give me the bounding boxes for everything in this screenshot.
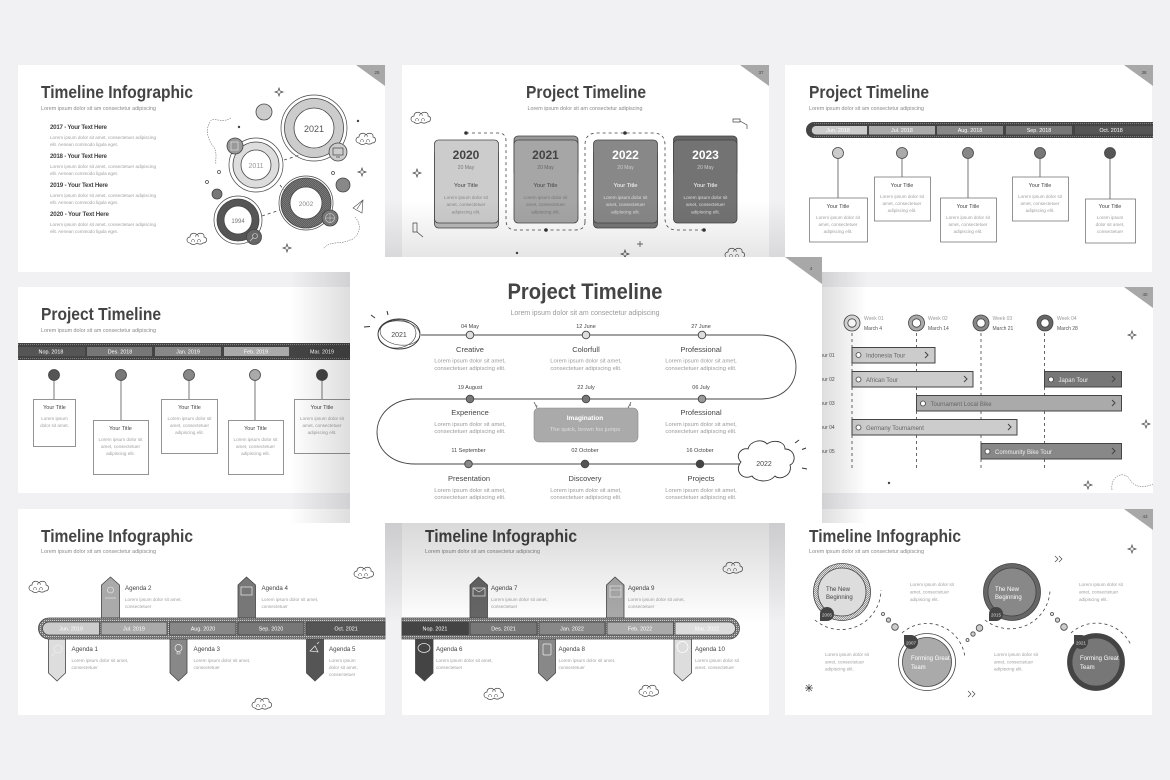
card 2020: adipiscing elit. (452, 210, 480, 214)
year list (50, 124, 156, 234)
body text: amet, consectetuer (910, 590, 950, 594)
milestone stems and nodes (48, 370, 328, 420)
milestone boxes: adipiscing elit. (106, 451, 135, 456)
agenda text: Agenda 1 (72, 646, 99, 653)
card 2020: 20 May (458, 165, 475, 171)
month track: Jul. 2018 (891, 128, 913, 134)
heading: Timeline Infographic (809, 526, 961, 546)
circle: Forming Great Team 2007: Forming Great (911, 656, 950, 662)
agenda text: Agenda 10 (695, 646, 725, 653)
card 2021: Your Title (534, 183, 557, 189)
card 2020: 2020 (453, 148, 480, 162)
panel: timeline infographic circles and teams (785, 509, 1153, 715)
agenda text: Agenda 5 (329, 646, 356, 653)
body text: amet, consectetuer (1079, 590, 1119, 594)
row 2 milestones: Professional (680, 408, 722, 417)
month track: Mar. 2022 (695, 626, 719, 632)
agenda text: Lorem ipsum (329, 658, 356, 663)
heading: Project Timeline (508, 279, 662, 304)
milestone boxes: Lorem ipsum (1097, 215, 1123, 220)
card 2022 (594, 140, 658, 228)
body text: amet, consectetuer (994, 660, 1034, 664)
week headers: March 28 (1057, 326, 1078, 332)
year list: 2020 - Your Text Here (50, 211, 110, 218)
row 2 milestones: Experience (451, 408, 489, 417)
row labels: Tour 03 (818, 401, 835, 407)
panel: project timeline dark track (18, 287, 385, 493)
circle: Forming Great Team 2007: Team (911, 665, 926, 671)
agenda text (436, 585, 740, 670)
doodles (805, 545, 1136, 697)
panel: timeline infographic agendas B (402, 509, 769, 715)
bar: Japan Tour: Japan Tour (1058, 378, 1088, 384)
agenda text: consectetuer (72, 665, 98, 670)
body text: Lorem ipsum dolor sit (825, 652, 870, 657)
card 2021: adipiscing elit. (531, 210, 560, 214)
row 3 milestones: 11 September (451, 448, 486, 454)
milestone boxes: Your Title (1099, 204, 1121, 210)
heading: Timeline Infographic (425, 526, 577, 546)
circle: Forming Great Team 2021: 2021 (1076, 640, 1087, 646)
corner fold 38: 38 (1141, 70, 1147, 75)
agenda text: Lorem ipsum dolor sit amet, (558, 658, 615, 663)
row 3 milestones: 02 October (571, 448, 599, 454)
agenda text: consectetuer (491, 604, 518, 609)
month track: Nop. 2018 (39, 350, 63, 356)
row 3 milestones: Lorem ipsum dolor sit amet, (434, 488, 506, 494)
row 1 milestones: consectetuer adipiscing elit. (434, 366, 506, 372)
milestone boxes: Lorem ipsum dolor sit (99, 437, 143, 442)
agenda text: consectetuer (329, 672, 356, 677)
year list: elit. Aenean commodo ligula eget. (50, 200, 118, 205)
row 3 milestones: consectetuer adipiscing elit. (665, 495, 737, 501)
corner fold 37 (740, 65, 769, 86)
bar: Indonesia Tour: Indonesia Tour (866, 354, 905, 360)
card 2022: 2022 (612, 148, 639, 162)
end badge 2022 cloud: 2022 (756, 461, 772, 468)
year list: elit. Aenean commodo ligula eget. (50, 171, 118, 176)
bar: Community Bike Tour (981, 444, 1122, 459)
milestone boxes: amet, consectetuer (1020, 201, 1060, 206)
row 1 milestones: Lorem ipsum dolor sit amet, (550, 358, 622, 364)
row labels: Tour 01 (818, 353, 835, 359)
circle: The New Beginning 2015: Beginning (995, 595, 1022, 601)
body text (825, 582, 1124, 672)
year list: Lorem ipsum dolor sit amet, consectetuer adipiscing (50, 135, 156, 140)
card 2023: adipiscing elit. (691, 210, 720, 214)
start badge 2021: 2021 (391, 332, 407, 339)
bar: African Tour: African Tour (866, 378, 898, 384)
agenda text: Agenda 8 (558, 646, 586, 653)
circle chart: 2021, 2011, 2002, 1994: 2002 (299, 201, 314, 208)
agenda text: Agenda 3 (194, 646, 221, 653)
row 1 milestones (434, 324, 737, 372)
body text: adipiscing elit. (910, 597, 939, 602)
card 2023: 2023 (692, 148, 719, 162)
week headers: Week 03 (992, 316, 1012, 322)
corner fold 4: 4 (810, 266, 813, 271)
agenda text: Lorem ipsum dolor sit (695, 658, 740, 663)
subheading: Lorem ipsum dolor sit am consectetur adipiscing (41, 328, 156, 334)
milestone boxes: Your Title (827, 204, 849, 210)
milestone boxes: Your Title (311, 405, 333, 411)
circle: Forming Great Team 2007 (898, 634, 956, 690)
card 2021: 20 May (537, 165, 554, 171)
bar: African Tour (852, 372, 973, 387)
bar: Tournament Local Bike (916, 396, 1122, 411)
circle: The New Beginning 2015: The New (995, 587, 1020, 593)
panel: project timeline cards (402, 65, 769, 272)
circle chart: 2021, 2011, 2002, 1994 (212, 95, 350, 244)
card 2022: amet, consectetuer (606, 202, 645, 207)
panel: tour gantt chart (785, 287, 1153, 493)
row 1 milestones: Colorfull (572, 345, 600, 354)
corner fold 4 (785, 257, 822, 284)
body text: Lorem ipsum dolor sit (994, 652, 1039, 657)
milestone boxes: dolor sit amet. (40, 423, 69, 428)
card 2021: Lorem ipsum dolor sit (524, 195, 568, 200)
row 1 milestones: 12 June (576, 324, 596, 330)
card 2021: 2021 (532, 148, 559, 162)
row labels: Tour 02 (818, 377, 835, 383)
week headers: March 21 (992, 326, 1014, 332)
clouds (29, 567, 374, 710)
row 2 milestones: 19 August (458, 385, 483, 391)
milestone boxes: Lorem ipsum dolor sit (816, 215, 861, 220)
circle: Forming Great Team 2021: Forming Great (1080, 656, 1119, 662)
milestone boxes: Your Title (244, 426, 267, 432)
milestone boxes: Lorem ipsum dolor sit (946, 215, 991, 220)
row 1 milestones: Creative (456, 345, 484, 354)
week headers (844, 315, 1078, 470)
corner fold 40 (1124, 287, 1153, 308)
corner fold 40: 40 (1142, 292, 1148, 297)
agenda text: Agenda 6 (436, 646, 463, 653)
card 2023: 20 May (697, 165, 714, 171)
callout: Imagination (534, 402, 638, 442)
year list: Lorem ipsum dolor sit amet, consectetuer adipiscing (50, 222, 156, 227)
milestone nodes (465, 331, 706, 468)
year list: elit. Aenean commodo ligula eget. (50, 142, 118, 147)
month track: Sep. 2018 (1027, 128, 1051, 134)
month track: Feb. 2022 (628, 626, 652, 632)
row 1 milestones: 27 June (691, 324, 711, 330)
doodles (411, 112, 747, 259)
agenda text: consectetuer (262, 604, 288, 609)
circle chart: 2021, 2011, 2002, 1994: 1994 (231, 219, 245, 225)
card 2023: Lorem ipsum dolor sit (684, 195, 728, 200)
milestone boxes: Lorem ipsum dolor sit (168, 416, 212, 421)
milestone boxes: adipiscing elit. (1026, 208, 1054, 213)
doodles (187, 88, 376, 252)
milestone boxes (810, 177, 1136, 243)
bar: Germany Tournament: Germany Tournament (866, 426, 924, 432)
milestone boxes: adipiscing elit. (308, 430, 336, 435)
card 2021: amet, consectetuer (526, 202, 565, 207)
month track: Des. 2018 (108, 350, 132, 356)
card 2021 (514, 136, 578, 223)
year list: 2019 - Your Text Here (50, 182, 109, 189)
agenda text: Lorem ipsum dolor sit amet, (194, 658, 250, 663)
month track: Aug. 2018 (958, 128, 982, 134)
milestone boxes: Your Title (957, 204, 979, 210)
circle: The New Beginning 2015 (984, 564, 1040, 621)
body text: Lorem ipsum dolor sit (910, 582, 955, 587)
year list: Lorem ipsum dolor sit amet, consectetuer adipiscing (50, 193, 156, 198)
row 3 milestones (434, 448, 737, 501)
milestone boxes: Lorem ipsum dolor sit (234, 437, 278, 442)
heading: Timeline Infographic (41, 82, 193, 102)
circle: The New Beginning 2005: 2005 (822, 612, 833, 618)
row 3 milestones: 16 October (686, 448, 714, 454)
corner fold 25 (356, 65, 385, 86)
agenda tags (416, 577, 692, 681)
body text: adipiscing elit. (1079, 597, 1108, 602)
dashed connectors (464, 131, 706, 232)
circle: Forming Great Team 2007: 2007 (906, 640, 917, 646)
agenda text: Agenda 9 (628, 585, 655, 592)
milestone boxes: amet, consectetuer (302, 423, 342, 428)
milestone boxes: Lorem ipsum dolor sit (1018, 194, 1063, 199)
row 3 milestones: Projects (687, 474, 715, 483)
milestone boxes: amet, consectetuer (882, 201, 922, 206)
week headers: March 4 (864, 326, 882, 332)
bar: Germany Tournament (852, 420, 1017, 435)
row labels: Tour 04 (818, 425, 835, 431)
year list: Lorem ipsum dolor sit amet, consectetuer adipiscing (50, 164, 156, 169)
month track: Nop. 2021 (423, 626, 447, 632)
row 1 milestones: 04 May (461, 324, 479, 330)
callout: Imagination: The quick, brown fox jumps (550, 427, 620, 433)
bar: Tournament Local Bike: Tournament Local Bike (930, 402, 992, 408)
row 2 milestones: 06 July (692, 385, 710, 391)
heading: Project Timeline (809, 82, 929, 102)
milestone boxes: adipiscing elit. (888, 208, 916, 213)
agenda text: Agenda 2 (125, 585, 152, 592)
row 2 milestones (434, 385, 737, 435)
agenda text: amet, consectetuer (695, 665, 735, 670)
milestone boxes: amet, consectetuer (236, 444, 275, 449)
agenda text: Lorem ipsum dolor sit amet, (491, 597, 548, 602)
milestone boxes: adipiscing elit. (954, 229, 982, 234)
milestone boxes: adipiscing elit. (824, 229, 852, 234)
row 1 milestones: Lorem ipsum dolor sit amet, (665, 358, 737, 364)
circle: The New Beginning 2005 (814, 564, 870, 621)
row 1 milestones: Professional (680, 345, 722, 354)
doodles (888, 331, 1153, 490)
corner fold 25: 25 (374, 70, 380, 75)
subheading: Lorem ipsum dolor sit am consectetur adipiscing (510, 310, 660, 317)
agenda text: dolor sit amet, (329, 665, 358, 670)
row labels (818, 353, 835, 455)
card 2020: amet, consectetuer (446, 202, 486, 207)
milestone boxes: adipiscing elit. (241, 451, 270, 456)
row 1 milestones: consectetuer adipiscing elit. (665, 366, 737, 372)
card 2022: 20 May (617, 165, 634, 171)
row 1 milestones: Lorem ipsum dolor sit amet, (434, 358, 506, 364)
agenda text: Lorem ipsum dolor sit amet, (262, 597, 318, 602)
month track: Aug. 2020 (191, 626, 215, 632)
subheading: Lorem ipsum dolor sit am consectetur adipiscing (41, 106, 156, 112)
milestone boxes: Lorem ipsum dolor sit (300, 416, 345, 421)
panel: project timeline track (785, 65, 1153, 272)
heading: Project Timeline (526, 82, 646, 102)
agenda tags (48, 577, 324, 681)
milestone boxes (34, 400, 350, 474)
agenda text: consectetuer (558, 665, 585, 670)
milestone boxes: Lorem ipsum (41, 416, 68, 421)
circle chart: 2021, 2011, 2002, 1994: 2011 (248, 163, 264, 170)
week headers: Week 04 (1057, 316, 1077, 322)
circle: Forming Great Team 2021 (1068, 634, 1124, 690)
month track: Jan. 2022 (560, 626, 584, 632)
milestone boxes: adipiscing elit. (175, 430, 204, 435)
subheading: Lorem ipsum dolor sit am consectetur adipiscing (41, 549, 156, 555)
milestone boxes: Your Title (891, 183, 913, 189)
milestone boxes: amet, consectetuer (948, 222, 988, 227)
corner fold 37: 37 (758, 70, 764, 75)
circle: The New Beginning 2005: Beginning (826, 595, 853, 601)
agenda text: Lorem ipsum dolor sit amet, (125, 597, 182, 602)
milestone boxes: Your Title (109, 426, 132, 432)
year list: elit. Aenean commodo ligula eget. (50, 229, 118, 234)
card 2020: Your Title (454, 183, 478, 189)
heading: Project Timeline (41, 304, 161, 324)
serpentine path (377, 335, 796, 464)
dashed arcs and dots (815, 590, 1131, 658)
row 3 milestones: Discovery (569, 474, 602, 483)
circle chart: 2021, 2011, 2002, 1994: 2021 (304, 124, 324, 134)
month track (18, 343, 363, 360)
month track: Sep. 2020 (259, 626, 283, 632)
agenda text: Lorem ipsum dolor sit amet, (72, 658, 128, 663)
circle: The New Beginning 2015: 2015 (991, 612, 1002, 618)
month track (402, 618, 740, 639)
corner fold 38 (1124, 65, 1153, 86)
month track (39, 618, 385, 639)
circle: The New Beginning 2005: The New (826, 587, 851, 593)
row 2 milestones: consectetuer adipiscing elit. (434, 429, 506, 435)
row 2 milestones: Lorem ipsum dolor sit amet, (434, 422, 506, 428)
body text: adipiscing elit. (825, 666, 854, 672)
end badge 2022 cloud (738, 440, 807, 481)
card 2020: Lorem ipsum dolor sit (444, 195, 489, 200)
month track: Jan. 2019 (176, 350, 200, 356)
card 2023: amet, consectetuer (686, 202, 725, 207)
agenda text: Lorem ipsum dolor sit amet, (436, 658, 493, 663)
row 1 milestones: consectetuer adipiscing elit. (550, 366, 622, 372)
year list: 2018 - Your Text Here (50, 153, 108, 160)
corner fold 43 (1124, 509, 1153, 530)
card 2022: Lorem ipsum dolor sit (604, 195, 648, 200)
agenda text (72, 585, 358, 677)
row 3 milestones: Presentation (448, 474, 490, 483)
bar: Indonesia Tour (852, 348, 935, 363)
card 2023: Your Title (694, 183, 717, 189)
row 2 milestones: 22 July (577, 385, 595, 391)
agenda text: Agenda 4 (262, 585, 289, 592)
milestone boxes: amet, consectetuer (818, 222, 858, 227)
milestone stems and nodes (832, 148, 1116, 199)
subheading: Lorem ipsum dolor sit am consectetur adipiscing (809, 106, 924, 112)
month track: Jun. 2018 (826, 128, 850, 134)
milestone boxes: amet, consectetuer (170, 423, 209, 428)
month track: Mar. 2019 (310, 350, 334, 356)
heading: Timeline Infographic (41, 526, 193, 546)
corner fold 43: 43 (1142, 514, 1148, 519)
card 2023 (674, 136, 737, 223)
agenda text: consectetuer (194, 665, 220, 670)
center panel shadow falloff (290, 200, 867, 623)
body text: amet, consectetuer (825, 660, 865, 664)
panel: timeline infographic agendas A (18, 509, 385, 715)
agenda text: Agenda 7 (491, 585, 518, 592)
row 2 milestones: Lorem ipsum dolor sit amet, (665, 422, 737, 428)
month track: Des. 2021 (491, 626, 516, 632)
body text: adipiscing elit. (994, 666, 1023, 672)
milestone boxes: Your Title (1029, 183, 1051, 189)
callout: Imagination: Imagination (567, 415, 603, 422)
subheading: Lorem ipsum dolor sit am consectetur adipiscing (528, 106, 643, 112)
month track: Feb. 2019 (244, 350, 268, 356)
row labels: Tour 05 (818, 449, 835, 455)
week headers: Week 01 (864, 316, 884, 322)
month track (806, 122, 1153, 138)
year list: 2017 - Your Text Here (50, 124, 108, 131)
body text: Lorem ipsum dolor sit (1079, 582, 1124, 587)
card 2022: adipiscing elit. (611, 210, 640, 214)
month track: Oct. 2018 (1099, 128, 1123, 134)
milestone boxes: dolor sit amet, (1096, 222, 1124, 227)
panel: timeline infographic circles (18, 65, 385, 272)
agenda text: consectetuer (125, 604, 152, 609)
card 2022: Your Title (614, 183, 637, 189)
milestone boxes: amet, consectetuer (101, 444, 140, 449)
agenda text: consectetuer (436, 665, 463, 670)
month track: Jul. 2019 (123, 626, 145, 632)
circle: Forming Great Team 2021: Team (1080, 665, 1095, 671)
row 2 milestones: consectetuer adipiscing elit. (665, 429, 737, 435)
clouds (484, 562, 743, 700)
milestone boxes: consectetuer (1097, 229, 1124, 234)
milestone boxes: Your Title (178, 405, 201, 411)
week headers: March 14 (928, 326, 949, 332)
month track: Oct. 2021 (334, 626, 358, 632)
month track: Jun. 2019 (59, 626, 83, 632)
row 3 milestones: consectetuer adipiscing elit. (434, 495, 506, 501)
subheading: Lorem ipsum dolor sit am consectetur adipiscing (425, 549, 540, 555)
week headers: Week 02 (928, 316, 948, 322)
bar: Community Bike Tour: Community Bike Tour (995, 450, 1052, 456)
center panel: project timeline (350, 257, 822, 523)
agenda text: Lorem ipsum dolor sit amet, (628, 597, 685, 602)
milestone boxes: Lorem ipsum dolor sit (880, 194, 925, 199)
row 3 milestones: consectetuer adipiscing elit. (550, 495, 622, 501)
row 3 milestones: Lorem ipsum dolor sit amet, (665, 488, 737, 494)
bar: Japan Tour (1044, 372, 1122, 387)
milestone boxes: Your Title (43, 405, 66, 411)
start badge 2021 (364, 311, 421, 350)
subheading: Lorem ipsum dolor sit am consectetur adipiscing (809, 549, 924, 555)
card 2020 (434, 140, 498, 228)
agenda text: consectetuer (628, 604, 655, 609)
row 3 milestones: Lorem ipsum dolor sit amet, (550, 488, 622, 494)
